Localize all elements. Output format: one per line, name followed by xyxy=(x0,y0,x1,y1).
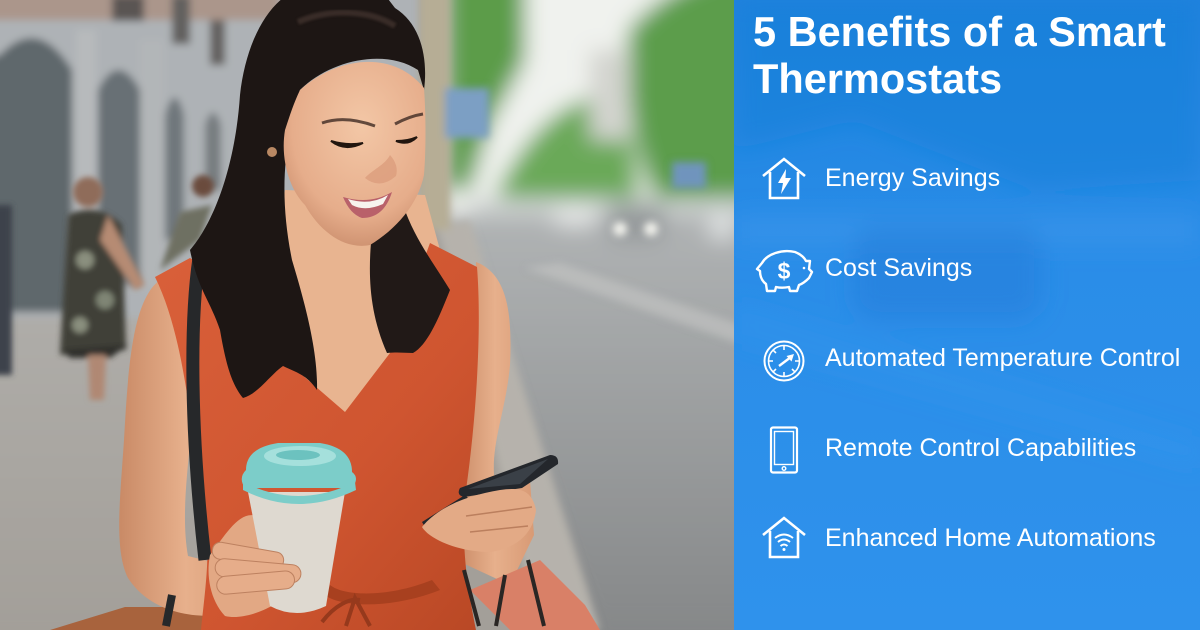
woman: neck and chest xyxy=(262,190,440,414)
benefit: cost savings xyxy=(756,250,972,292)
shopping bag xyxy=(464,560,600,630)
coffee cup xyxy=(242,443,356,613)
face xyxy=(267,62,426,246)
woman: arm left xyxy=(119,280,252,616)
hand holding phone xyxy=(422,489,536,552)
phone xyxy=(422,455,558,527)
icon: house with lightning bolt xyxy=(762,158,806,200)
label: Cost Savings xyxy=(825,254,972,282)
benefit: automated temperature control xyxy=(764,340,1180,382)
label: Automated Temperature Control xyxy=(825,344,1180,372)
hair xyxy=(190,0,450,398)
woman: arm right xyxy=(456,262,534,585)
bag strap xyxy=(193,258,205,560)
label: Remote Control Capabilities xyxy=(825,434,1136,462)
background pedestrians xyxy=(0,175,214,400)
icon: piggy bank with dollar sign xyxy=(756,250,814,292)
label: Enhanced Home Automations xyxy=(825,524,1156,552)
panel background: blurred blue street tint xyxy=(734,0,1200,315)
icon: house with wifi xyxy=(762,516,806,558)
benefit: energy savings xyxy=(762,158,1000,200)
benefit: enhanced home automations xyxy=(762,516,1156,558)
background: street scene xyxy=(0,0,800,630)
icon: piggy bank with dollar sign: $ xyxy=(778,258,791,284)
title: 5 Benefits of a Smart Thermostats xyxy=(753,8,1166,102)
icon: gauge dial xyxy=(764,340,804,382)
panel: benefits xyxy=(734,0,1200,630)
woman: orange dress xyxy=(155,243,479,630)
icon: smartphone xyxy=(770,426,798,474)
fingers on cup xyxy=(211,541,302,595)
bench xyxy=(50,607,205,630)
hand holding cup xyxy=(209,515,302,617)
photo: woman with coffee cup looking at phone on a city street xyxy=(0,0,734,630)
benefit: remote control capabilities xyxy=(770,426,1136,474)
label: Energy Savings xyxy=(825,164,1000,192)
